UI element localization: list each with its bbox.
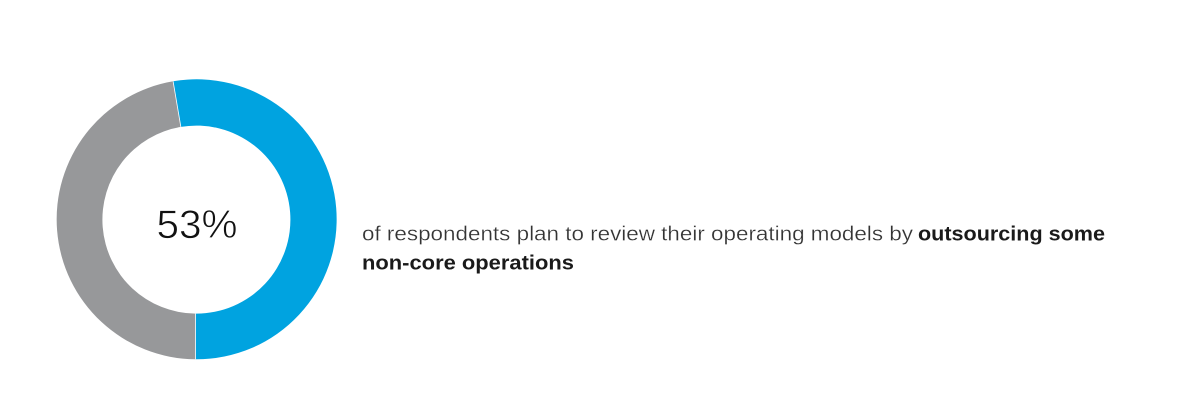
line 1 regular: of respondents plan to review their operating models by	[362, 224, 913, 246]
value label: 53%	[156, 203, 238, 247]
description text	[362, 224, 1105, 274]
segment separators	[173, 81, 196, 359]
donut segment: remaining 47% grey	[57, 81, 196, 359]
donut chart	[57, 79, 337, 359]
donut segment: 53% blue	[173, 79, 337, 359]
line 2 bold: non-core operations	[362, 252, 574, 274]
line 1 bold: outsourcing some	[918, 224, 1105, 246]
